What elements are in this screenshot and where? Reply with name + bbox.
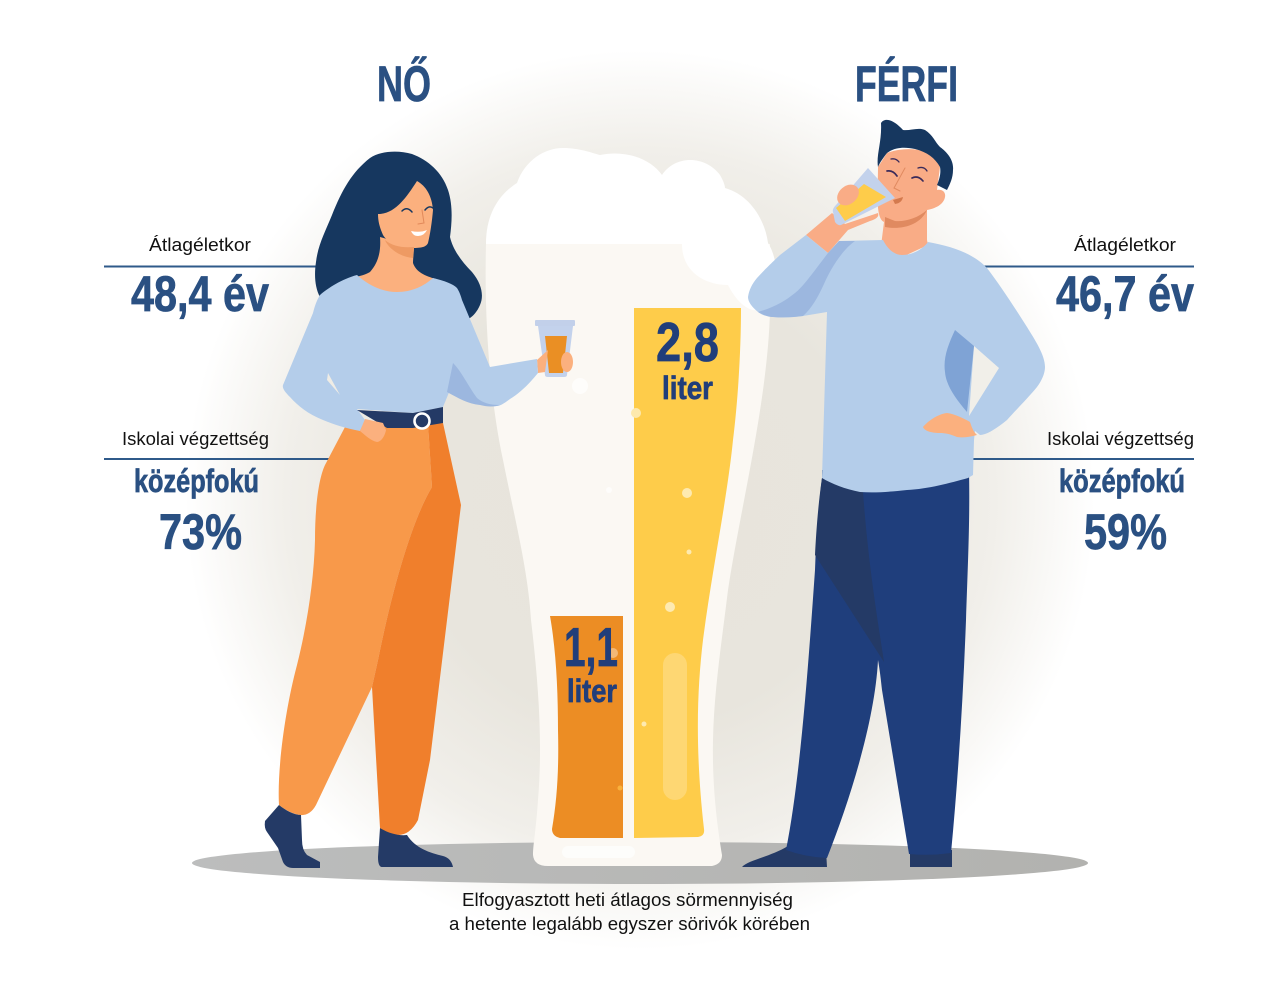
belt [357, 407, 443, 428]
unit liter: liter [662, 370, 713, 406]
right foot [378, 828, 453, 867]
woman education percent: 73% [159, 504, 242, 560]
face [378, 181, 433, 248]
sweater [283, 275, 538, 431]
raised hand [806, 213, 878, 253]
woman average age value: 48,4 év [131, 266, 269, 322]
unit liter: liter [567, 673, 617, 709]
left stat divider lines [104, 266, 334, 460]
hair [315, 152, 482, 340]
bubble on orange bar [618, 786, 622, 790]
hand with glass [537, 350, 573, 373]
beer foam [486, 148, 776, 310]
woman education label: Iskolai végzettség [122, 429, 269, 449]
caption: Elfogyasztott heti átlagos sörmennyiség [462, 890, 793, 910]
man education label: Iskolai végzettség [1047, 429, 1194, 449]
man average age label: Átlagéletkor [1074, 235, 1176, 255]
man education level: középfokú [1059, 463, 1185, 499]
left foot [265, 805, 320, 868]
hair [878, 120, 953, 190]
mouth [893, 197, 903, 204]
neck and face [878, 149, 945, 258]
sweater [748, 235, 1045, 492]
figure: man [742, 120, 1045, 867]
value 1,1: 1,1 [564, 616, 618, 678]
right shoe [910, 850, 952, 867]
fingers [833, 180, 863, 210]
glass bubbles [572, 378, 612, 493]
arm gap [969, 346, 999, 416]
pants [279, 424, 432, 815]
bar: women 1.1 liter [550, 616, 623, 838]
woman average age label: Átlagéletkor [149, 235, 251, 255]
neck shadow [385, 240, 414, 258]
trousers [786, 470, 969, 858]
man education percent: 59% [1084, 504, 1167, 560]
heading: woman: NŐ [377, 56, 431, 112]
eyes, brows and nose [887, 159, 927, 191]
bubble near top of yellow bar [631, 408, 641, 418]
sleeve shadow [447, 363, 500, 406]
bubbles [642, 488, 692, 726]
right stat divider lines [965, 266, 1194, 460]
woman education level: középfokú [134, 463, 259, 499]
bubble behind figure [608, 648, 618, 658]
man average age value: 46,7 év [1056, 266, 1194, 322]
belt buckle [414, 414, 430, 428]
smile [411, 230, 427, 236]
beer glass [486, 244, 770, 866]
glass base highlight [562, 846, 635, 858]
caption: a hetente legalább egyszer sörivók körében [449, 914, 810, 934]
eyes and nose [402, 207, 433, 224]
drinking glass [535, 320, 575, 377]
ground shadow [192, 842, 1088, 884]
figure: woman [265, 152, 575, 868]
bar highlight [663, 653, 687, 800]
value 2,8: 2,8 [656, 311, 719, 373]
pants shadow side [372, 423, 461, 835]
sleeve shadow [758, 241, 855, 317]
left shoe [742, 846, 827, 867]
trousers shadow [815, 470, 884, 662]
torso shadow [945, 330, 974, 412]
heading: man: FÉRFI [855, 56, 958, 112]
beer in glass [836, 184, 886, 221]
neck shadow [885, 210, 927, 228]
hand on hip [923, 413, 977, 437]
sweater gap at waist [327, 373, 340, 395]
neck [355, 237, 436, 295]
hand in pocket [360, 419, 386, 442]
bar: men 2.8 liter [634, 308, 741, 838]
caption [449, 890, 810, 934]
beer glass at mouth [833, 168, 895, 225]
